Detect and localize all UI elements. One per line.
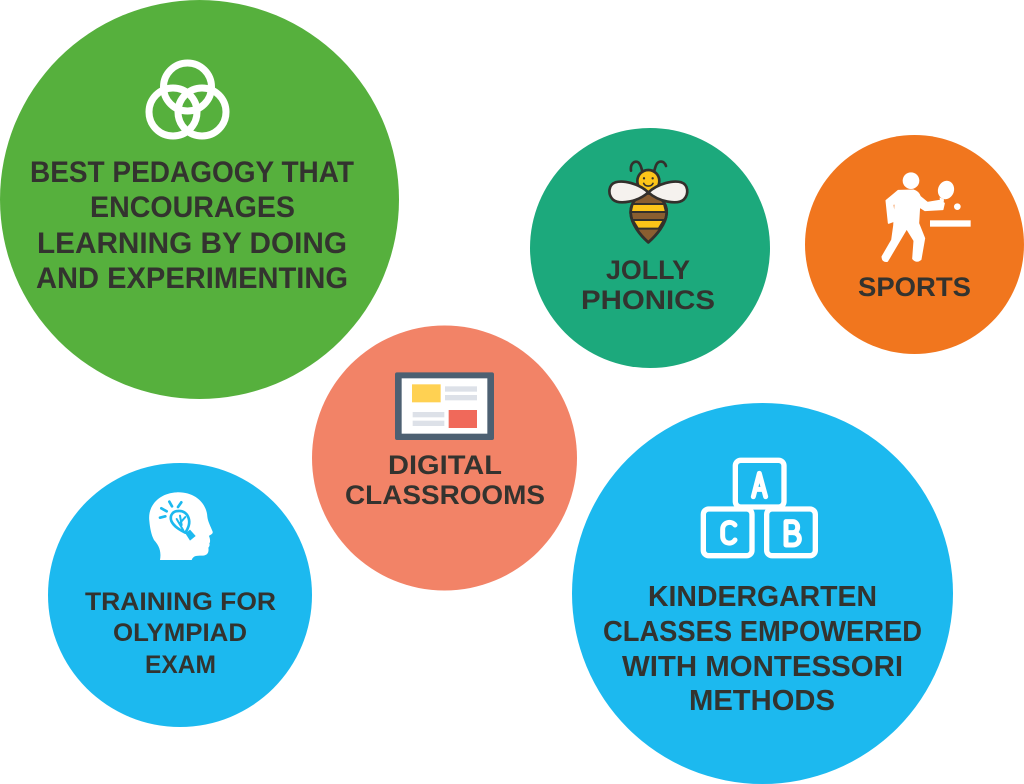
heading: kindergarten: KINDERGARTEN [648, 581, 877, 613]
heading: sports: SPORTS [858, 272, 971, 302]
heading: olympiad training [85, 588, 276, 679]
panel: olympiad training [48, 463, 312, 727]
heading: best pedagogy [30, 156, 354, 295]
heading: best pedagogy: AND EXPERIMENTING [36, 262, 348, 295]
icon: table tennis player [882, 172, 971, 261]
heading: jolly phonics [581, 255, 715, 315]
icon: head with light bulb [149, 492, 213, 560]
panel: digital classrooms [312, 326, 577, 590]
heading: kindergarten: CLASSES EMPOWERED [603, 616, 922, 648]
heading: kindergarten: METHODS [689, 685, 835, 717]
heading: best pedagogy: BEST PEDAGOGY THAT [30, 156, 354, 189]
panel: jolly phonics [530, 128, 770, 368]
panel: kindergarten [572, 403, 953, 784]
panel: best pedagogy [0, 0, 399, 399]
heading: kindergarten [603, 581, 922, 717]
icon: bee [609, 162, 687, 242]
heading: olympiad training: OLYMPIAD [113, 619, 247, 647]
heading: digital classrooms: CLASSROOMS [345, 480, 545, 510]
heading: digital classrooms [345, 450, 545, 510]
heading: jolly phonics: PHONICS [581, 285, 715, 315]
panel: sports [805, 135, 1024, 354]
heading: olympiad training: TRAINING FOR [85, 588, 276, 616]
heading: kindergarten: WITH MONTESSORI [622, 651, 903, 683]
icon: three overlapping rings [149, 63, 226, 136]
icon: alphabet blocks [703, 460, 815, 556]
icon: digital screen [395, 372, 494, 440]
heading: olympiad training: EXAM [145, 651, 216, 679]
heading: best pedagogy: LEARNING BY DOING [37, 227, 347, 260]
heading: jolly phonics: JOLLY [606, 255, 690, 285]
heading: digital classrooms: DIGITAL [388, 450, 502, 480]
heading: best pedagogy: ENCOURAGES [90, 191, 295, 224]
